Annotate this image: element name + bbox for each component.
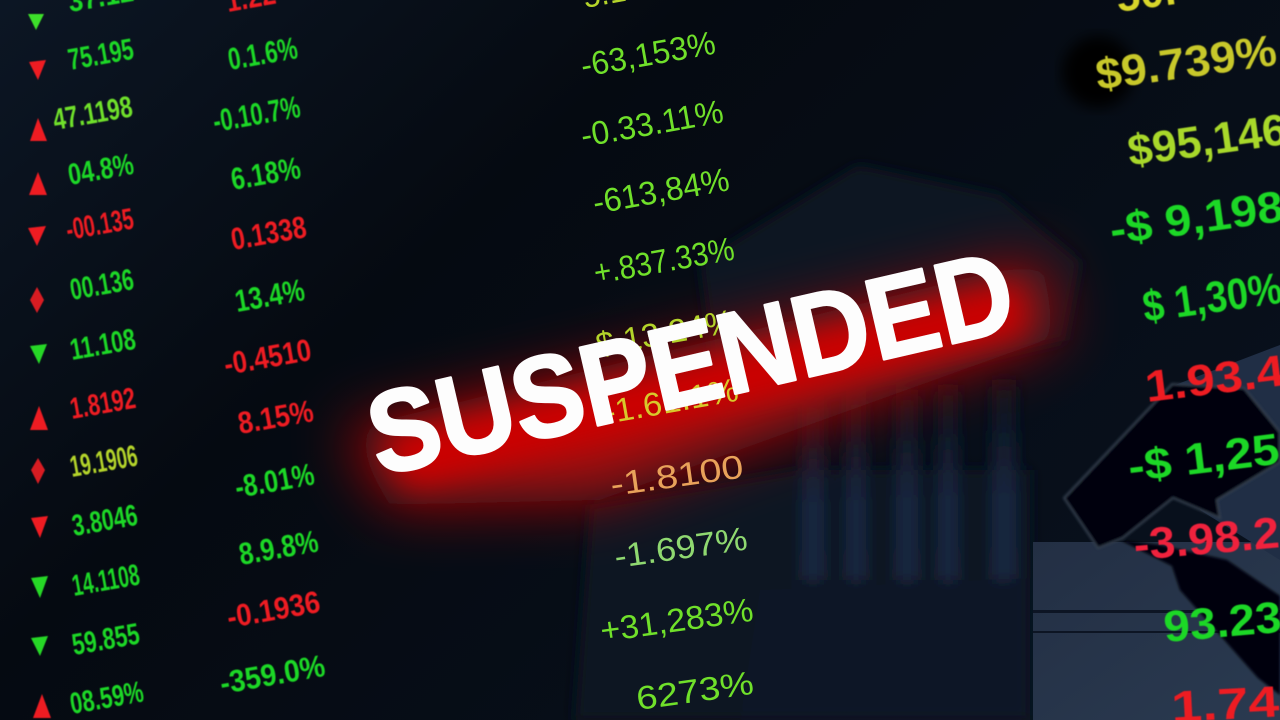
ticker column 3: -0.1936 bbox=[224, 584, 323, 635]
ticker column 3: 13.4% bbox=[232, 272, 307, 319]
steps bbox=[740, 578, 1030, 720]
ticker column 2: 59.855 bbox=[69, 618, 142, 662]
ticker column 4: +31,283% bbox=[598, 591, 755, 649]
ticker column 4: -0.33.11% bbox=[578, 92, 726, 154]
ticker column 4: -63,153% bbox=[578, 24, 718, 84]
ticker column 2: 08.59% bbox=[67, 676, 146, 720]
ticker column 3 bbox=[210, 0, 328, 701]
red glow behind banner bbox=[345, 260, 1060, 505]
ticker column 3: -8.01% bbox=[232, 457, 317, 505]
ticker column 2: 14.1108 bbox=[69, 559, 142, 603]
ticker column 3: -0.10.7% bbox=[210, 89, 303, 139]
ticker column 2: 47.1198 bbox=[50, 91, 135, 137]
ticker column 3: 8.15% bbox=[235, 393, 316, 441]
ticker column 2: -00.135 bbox=[63, 203, 136, 247]
ticker column 4: $.13.24% bbox=[593, 302, 737, 363]
plinth panel at right bbox=[1033, 345, 1280, 720]
ticker column 2: 00.136 bbox=[67, 263, 136, 307]
ticker column 3: -359.0% bbox=[217, 648, 328, 701]
ticker column 3: -0.4510 bbox=[221, 332, 314, 382]
ticker column 3: 8.9.8% bbox=[236, 524, 321, 572]
ticker column 4: 6273% bbox=[634, 664, 756, 717]
ticker column 2: 3.8046 bbox=[69, 499, 140, 543]
ticker column 4 bbox=[578, 0, 756, 717]
gavel handle bbox=[1120, 540, 1280, 695]
ticker column 5: 1.93.4 bbox=[1142, 346, 1280, 412]
banner word: SUSPENDED: SUSPENDED bbox=[355, 226, 1026, 500]
ink smudge top right bbox=[1062, 36, 1134, 108]
ticker column 5: -$ 9,198 bbox=[1107, 182, 1280, 255]
pediment bbox=[700, 165, 1080, 420]
building base bbox=[575, 470, 1030, 720]
ticker column 5: -$ 1,25 bbox=[1125, 425, 1280, 492]
ticker column 2: 75.195 bbox=[65, 33, 136, 77]
icon: gavel bbox=[1064, 384, 1280, 695]
ticker column 4: -1.8100 bbox=[608, 448, 746, 503]
ticker column 2 bbox=[50, 0, 146, 720]
ticker column 3: 0.1.6% bbox=[225, 30, 300, 77]
building: government temple facade bbox=[575, 165, 1080, 720]
ticker column 4: +.837.33% bbox=[591, 230, 737, 291]
ticker column 3: 6.18% bbox=[228, 150, 303, 197]
ticker column 3: 0.1338 bbox=[228, 209, 309, 257]
ticker column 4: -1.697% bbox=[612, 520, 750, 575]
ticker column 1: arrows bbox=[28, 14, 51, 718]
ticker column 5 bbox=[1093, 0, 1280, 720]
ticker column 5: $9.739% bbox=[1093, 26, 1280, 100]
ticker column 5: 93.23 bbox=[1162, 593, 1280, 652]
ticker column 2: 19.1906 bbox=[67, 440, 140, 484]
ticker column 4: -613,84% bbox=[590, 160, 732, 221]
ticker column 2: 1.8192 bbox=[67, 382, 138, 426]
ticker column 4: -1.61.1% bbox=[601, 371, 741, 431]
ticker column 5: -3.98.2 bbox=[1132, 508, 1280, 570]
ticker column 2: 04.8% bbox=[65, 148, 136, 192]
columns bbox=[802, 380, 1016, 580]
gavel head bbox=[1064, 384, 1280, 548]
ticker column 2: 11.108 bbox=[67, 323, 138, 367]
